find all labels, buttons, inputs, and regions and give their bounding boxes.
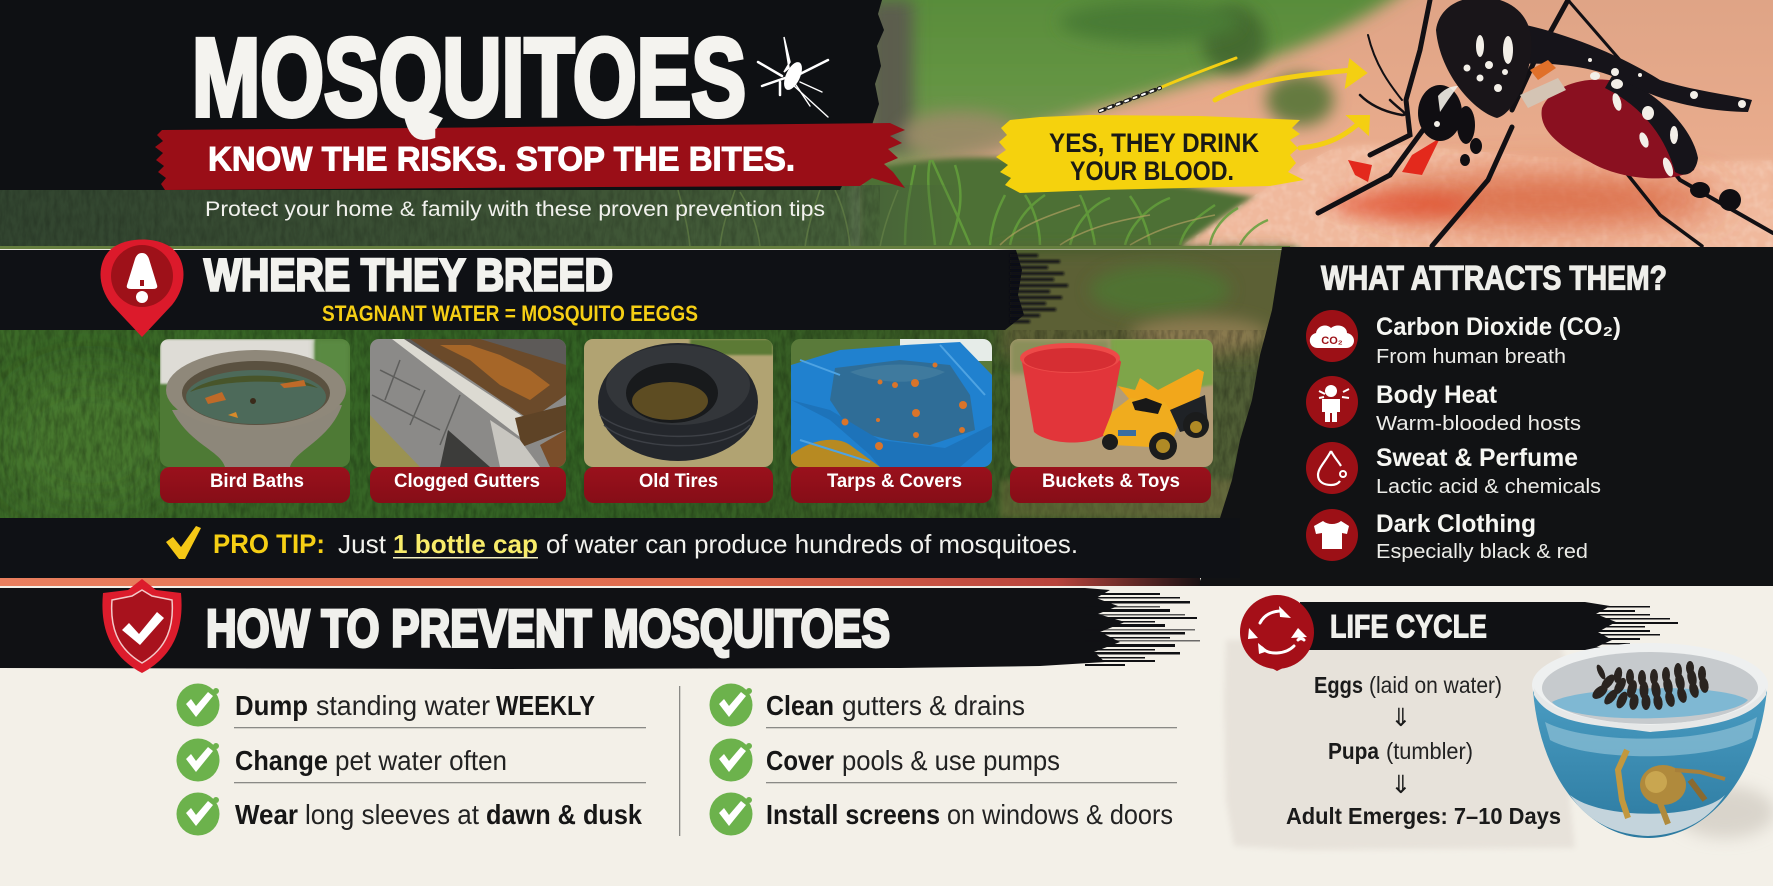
card label <box>370 467 566 503</box>
life cycle steps: Adult Emerges: 7–10 Days <box>1286 803 1561 829</box>
icon: shield <box>102 579 182 673</box>
item: sweat and perfume: Sweat & Perfume <box>1376 444 1578 472</box>
tip: wear long sleeves <box>176 792 642 836</box>
prevention list: left column <box>176 684 642 836</box>
prevention list: right column <box>710 684 1173 836</box>
item: sweat and perfume <box>1306 442 1601 498</box>
icon: warning pin <box>100 240 184 337</box>
item: body heat <box>1306 376 1581 435</box>
life cycle steps: ⇓ <box>1391 703 1411 732</box>
icon: yellow check <box>166 526 201 559</box>
card label: Buckets & Toys <box>1042 471 1180 492</box>
item: body heat: Warm-blooded hosts <box>1376 413 1581 435</box>
upper abdomen <box>1520 25 1752 112</box>
tagline: KNOW THE RISKS. STOP THE BITES. <box>208 140 795 178</box>
panel: life cycle <box>1224 595 1678 850</box>
tip: install screens: on windows & doors <box>947 799 1173 830</box>
tip: wear long sleeves: long sleeves at <box>305 799 479 830</box>
tip: cover pools: pools & use pumps <box>842 745 1060 776</box>
icon: green check <box>710 738 752 782</box>
item: carbon dioxide <box>1306 310 1621 368</box>
tip: install screens: Install screens <box>766 799 940 830</box>
item: dark clothing: Dark Clothing <box>1376 510 1536 538</box>
pupa and larvae <box>1618 750 1725 824</box>
header photo: mosquito biting skin <box>830 0 1773 260</box>
panel: what attracts them background <box>1198 247 1773 586</box>
item: body heat: Body Heat <box>1376 381 1498 409</box>
pro tip band <box>0 518 1240 578</box>
icon: green check <box>710 684 752 726</box>
icon: drop <box>1306 442 1358 494</box>
card label: Tarps & Covers <box>827 471 962 492</box>
tip: clean gutters <box>710 684 1025 726</box>
item: carbon dioxide: Carbon Dioxide (CO₂) <box>1376 313 1621 341</box>
orange divider strip <box>0 578 1200 586</box>
icon: green check <box>710 792 752 836</box>
pro tip text: PRO TIP: <box>213 529 325 559</box>
icon: person with heat <box>1306 376 1358 428</box>
card label: Clogged Gutters <box>394 471 540 492</box>
card label <box>584 467 773 503</box>
tip: change pet water: pet water often <box>335 745 507 776</box>
item: carbon dioxide: From human breath <box>1376 346 1566 368</box>
title: MOSQUITOES <box>192 16 746 140</box>
pro tip text: 1 bottle cap <box>393 529 538 559</box>
pro tip text: of water can produce hundreds of mosquitoes. <box>546 529 1078 559</box>
card label <box>791 467 992 503</box>
section background: lawn <box>0 250 1290 520</box>
tip: dump water: standing water <box>316 690 490 721</box>
card label <box>1010 467 1211 503</box>
icon: cycle arrows <box>1240 595 1314 671</box>
icon: mosquito silhouette <box>758 37 828 117</box>
card label <box>160 467 350 503</box>
life cycle heading band <box>1300 602 1678 650</box>
blood on skin <box>1348 160 1372 182</box>
card: clogged gutters <box>370 339 566 503</box>
life cycle steps: Pupa <box>1328 738 1379 764</box>
how to prevent header band <box>0 579 1200 673</box>
tip: clean gutters: gutters & drains <box>842 690 1025 721</box>
item: dark clothing <box>1306 509 1588 563</box>
icon: green check <box>176 738 220 782</box>
bowl illustration <box>1532 643 1773 838</box>
icon: CO2 cloud: CO₂ <box>1321 335 1343 347</box>
card: old tires <box>584 339 773 503</box>
subheading: STAGNANT WATER = MOSQUITO EEGGS <box>322 301 698 326</box>
tip: dump water <box>176 684 595 726</box>
subtitle: Protect your home & family with these proven prevention tips <box>205 197 825 221</box>
callout text: YOUR BLOOD. <box>1070 156 1234 186</box>
card: buckets and toys <box>1010 339 1213 503</box>
card: bird baths <box>160 339 350 503</box>
brush fringe <box>1085 593 1200 666</box>
header left: grass strip <box>0 185 960 247</box>
pro tip text <box>213 529 1078 559</box>
head <box>1418 85 1462 141</box>
header black brush panel <box>0 0 884 190</box>
brush fringe <box>1010 254 1068 323</box>
item: sweat and perfume: Lactic acid & chemicals <box>1376 476 1601 498</box>
life cycle steps: (tumbler) <box>1386 738 1473 764</box>
white spots <box>1434 35 1746 178</box>
attracts panel content <box>1306 259 1667 563</box>
grass blades <box>905 160 1268 245</box>
tip: cover pools <box>710 738 1060 782</box>
tip: wear long sleeves: dawn & dusk <box>486 799 642 830</box>
mosquito illustration <box>1318 0 1773 246</box>
where they breed header band <box>0 240 1068 337</box>
eggs raft <box>1590 661 1710 711</box>
legs <box>1318 0 1773 246</box>
tip: change pet water: Change <box>235 745 328 776</box>
tip: change pet water <box>176 738 507 782</box>
blood-filled abdomen <box>1542 80 1695 178</box>
life cycle steps: (laid on water) <box>1369 672 1502 698</box>
card: tarps and covers <box>791 339 992 503</box>
life cycle heading band: LIFE CYCLE <box>1330 608 1487 644</box>
heading: WHERE THEY BREED <box>204 250 613 301</box>
tip: dump water: Dump <box>235 690 308 721</box>
card label: Bird Baths <box>210 471 304 492</box>
icon: CO2 cloud <box>1306 310 1358 362</box>
tip: dump water: WEEKLY <box>496 690 595 721</box>
tip: cover pools: Cover <box>766 745 834 776</box>
card label: Old Tires <box>639 471 718 492</box>
pro tip text: Just <box>338 529 387 559</box>
heading: WHAT ATTRACTS THEM? <box>1321 259 1667 297</box>
icon: green check <box>176 792 220 836</box>
mouth parts <box>1457 106 1741 211</box>
tip: clean gutters: Clean <box>766 690 834 721</box>
tip: install screens <box>710 792 1173 836</box>
callout text <box>1049 128 1259 186</box>
thorax <box>1436 0 1532 118</box>
icon: green check <box>176 684 220 726</box>
pale joint <box>1520 78 1566 108</box>
life cycle steps: Eggs <box>1314 672 1363 698</box>
yellow callout sign <box>996 115 1304 193</box>
life cycle steps <box>1286 672 1561 829</box>
tip: wear long sleeves: Wear <box>235 799 298 830</box>
item: dark clothing: Especially black & red <box>1376 541 1588 563</box>
icon: t-shirt <box>1306 509 1358 561</box>
heading: HOW TO PREVENT MOSQUITOES <box>206 600 890 658</box>
callout text: YES, THEY DRINK <box>1049 128 1259 158</box>
yellow arrows <box>1100 58 1369 148</box>
red brush banner <box>155 123 905 190</box>
life cycle steps: ⇓ <box>1391 770 1411 799</box>
